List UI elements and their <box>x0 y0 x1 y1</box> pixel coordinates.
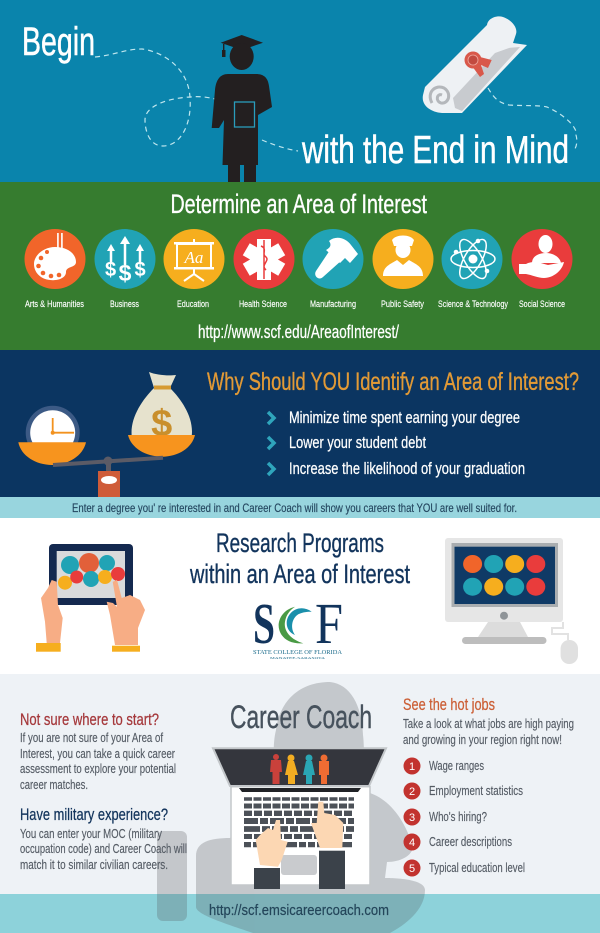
text block: military: Have military experience? <box>20 805 168 824</box>
text block: not sure <box>20 711 176 792</box>
icon: education <box>164 229 224 289</box>
icon: education: Aa <box>184 248 203 267</box>
logo: scf <box>253 591 343 660</box>
logo: scf: STATE COLLEGE OF FLORIDA <box>253 650 343 656</box>
list: hot jobs: Wage ranges <box>429 759 484 773</box>
list: hot jobs: Employment statistics <box>429 784 523 798</box>
text block: military: occupation code) and Career Coach will <box>20 842 187 856</box>
list: hot jobs: 2 <box>409 786 415 798</box>
heading: career coach: Career Coach <box>230 699 372 735</box>
panel: header <box>0 0 600 182</box>
illustration: tablet with hands <box>36 544 145 652</box>
label: categories <box>25 299 565 310</box>
list: hot jobs: Career descriptions <box>429 835 512 849</box>
icon: graduate folder <box>234 102 254 127</box>
dashed path: begin to graduate <box>95 49 219 146</box>
list: hot jobs: 4 <box>409 837 415 849</box>
logo: scf: F <box>315 591 343 656</box>
illustration: laptop <box>213 748 386 889</box>
icon: business <box>94 229 156 289</box>
illustration: desktop computer <box>445 538 578 664</box>
label: categories: Public Safety <box>381 299 424 310</box>
illustration: background silhouette <box>157 682 425 933</box>
link: career coach url: http://scf.emsicareercoach.com <box>209 902 389 919</box>
banner: enter a degree <box>0 497 600 518</box>
figures on screen <box>270 754 329 784</box>
label: categories: Manufacturing <box>310 299 356 310</box>
icon: business: $ <box>105 259 116 281</box>
panel: why identify <box>0 350 600 497</box>
icon: health science <box>234 229 294 289</box>
icon: public safety <box>372 229 434 289</box>
icon: arts palette <box>24 229 86 289</box>
list: hot jobs: Typical education level <box>429 861 525 875</box>
list: hot jobs: 3 <box>409 812 415 824</box>
icon: diploma <box>423 16 527 113</box>
icon: business: $ <box>119 260 132 286</box>
text block: not sure: Not sure where to start? <box>20 711 159 729</box>
list: hot jobs <box>404 758 525 876</box>
text block: military: match it to similar civilian careers. <box>20 858 168 872</box>
list: hot jobs: 5 <box>409 863 415 875</box>
banner: footer strip <box>0 894 600 933</box>
text block: not sure: career matches. <box>20 778 88 792</box>
text block: not sure: If you are not sure of your Area of <box>20 731 163 745</box>
heading: research programs: within an Area of Interest <box>189 559 410 589</box>
panel: determine an area of interest <box>0 182 600 350</box>
icon: manufacturing <box>302 229 364 289</box>
heading: begin: Begin <box>22 20 95 64</box>
text block: military: You can enter your MOC (military <box>20 827 163 841</box>
list: reasons <box>268 408 525 478</box>
text block: military <box>20 805 187 872</box>
icon: graduate <box>212 35 272 182</box>
icon: business: $ <box>134 259 146 281</box>
list: reasons: Lower your student debt <box>289 433 426 452</box>
icon: science and technology <box>442 229 502 289</box>
list: reasons: Increase the likelihood of your graduation <box>289 459 525 478</box>
heading: determine: Determine an Area of Interest <box>170 189 427 219</box>
text block: not sure: Interest, you can take a quick career <box>20 747 175 761</box>
logo: scf: MANATEE-SARASOTA <box>270 656 326 660</box>
dashed path: graduate to text <box>262 140 298 151</box>
list: hot jobs: 1 <box>409 761 415 773</box>
dashed path: diploma to text <box>488 88 577 150</box>
text block: hot jobs <box>403 696 574 747</box>
label: categories: Social Science <box>519 299 565 310</box>
panel: career coach <box>0 674 600 933</box>
list: hot jobs: Who's hiring? <box>429 810 487 824</box>
label: categories: Education <box>177 299 209 310</box>
illustration: scale <box>18 372 195 497</box>
icon: social science <box>512 229 572 289</box>
label: categories: Business <box>110 299 139 310</box>
text block: hot jobs: See the hot jobs <box>403 696 495 714</box>
heading: research programs <box>189 528 410 589</box>
hands <box>254 802 345 889</box>
logo: scf: S <box>253 591 275 656</box>
panel: research programs <box>0 518 600 674</box>
label: categories: Arts & Humanities <box>25 299 84 310</box>
label: categories: Science & Technology <box>438 299 508 310</box>
label: categories: Health Science <box>239 299 287 310</box>
text block: not sure: assessment to explore your potential <box>20 762 176 776</box>
illustration: scale: $ <box>151 403 172 445</box>
heading: research programs: Research Programs <box>216 528 384 558</box>
link: area of interest url: http://www.scf.edu/AreaofInterest/ <box>198 322 399 342</box>
list: reasons: Minimize time spent earning your degree <box>289 408 520 427</box>
